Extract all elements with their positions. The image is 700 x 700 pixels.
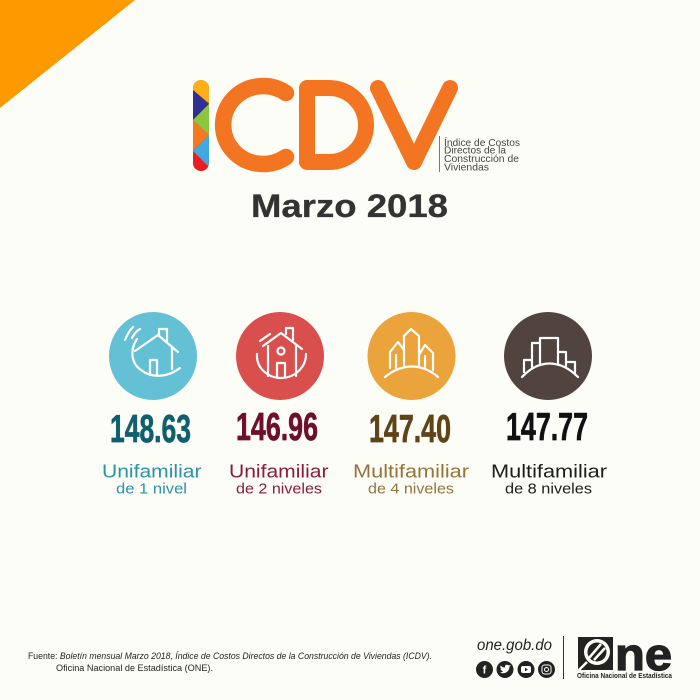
logo letter I multicolour bar <box>193 80 209 171</box>
logo divider <box>439 136 440 172</box>
value 147.40: 147.40 <box>369 408 451 451</box>
icon: two-level house <box>236 312 324 400</box>
logo descriptor text: Viviendas <box>444 162 489 174</box>
label Unifamiliar de 1 nivel: Unifamiliar <box>102 462 202 482</box>
label Unifamiliar de 1 nivel: de 1 nivel <box>116 480 187 498</box>
website address: one.gob.do <box>477 637 552 654</box>
icon: four-level buildings <box>368 312 456 400</box>
logo: ICDV <box>193 80 520 174</box>
logo descriptor text: Directos de la <box>444 146 506 156</box>
label Unifamiliar de 2 niveles: de 2 niveles <box>236 480 322 498</box>
logo descriptor text: Índice de Costos <box>444 136 520 149</box>
title: Marzo 2018: Marzo 2018 <box>251 188 448 224</box>
icon: facebook: f <box>483 664 487 676</box>
corner triangle <box>0 0 135 108</box>
icon: single-level house <box>109 312 197 400</box>
source note: Fuente: Boletín mensual Marzo 2018, Índice de Costos Directos de la Construcción de Viviendas (ICDV). <box>28 651 432 662</box>
icon: youtube <box>518 661 534 678</box>
label Unifamiliar de 2 niveles: Unifamiliar <box>229 462 328 482</box>
website and social media <box>476 637 555 678</box>
label Multifamiliar de 4 niveles: de 4 niveles <box>368 480 454 498</box>
label Multifamiliar de 4 niveles: Multifamiliar <box>353 462 469 482</box>
source note <box>28 651 432 674</box>
column: Multifamiliar de 8 niveles <box>491 312 607 498</box>
source note: Oficina Nacional de Estadística (ONE). <box>56 663 213 674</box>
logo letter V <box>378 88 450 162</box>
label Multifamiliar de 8 niveles: Multifamiliar <box>491 462 607 482</box>
logo: ONE <box>577 629 673 680</box>
logo descriptor text <box>444 136 520 174</box>
label Unifamiliar de 1 nivel <box>102 462 202 498</box>
column: Multifamiliar de 4 niveles <box>353 312 469 498</box>
ONE caption: Oficina Nacional de Estadística <box>577 671 673 680</box>
label Unifamiliar de 2 niveles <box>229 462 328 498</box>
ONE wordmark: ne <box>615 629 672 680</box>
label Multifamiliar de 8 niveles <box>491 462 607 498</box>
ONE square emblem <box>578 637 613 671</box>
label Multifamiliar de 4 niveles <box>353 462 469 498</box>
column: Unifamiliar de 2 niveles <box>229 312 328 498</box>
icon: eight-level buildings <box>504 312 592 400</box>
icon: twitter <box>496 661 514 678</box>
label Multifamiliar de 8 niveles: de 8 niveles <box>505 480 592 498</box>
footer divider <box>563 636 564 679</box>
icon: instagram <box>538 661 555 678</box>
value 147.77: 147.77 <box>506 406 588 449</box>
logo letter C <box>223 86 286 164</box>
value 148.63: 148.63 <box>110 408 191 451</box>
column: Unifamiliar de 1 nivel <box>102 312 202 498</box>
logo descriptor text: Construcción de <box>444 154 519 165</box>
logo letter D <box>307 88 366 162</box>
value 146.96: 146.96 <box>236 406 318 449</box>
